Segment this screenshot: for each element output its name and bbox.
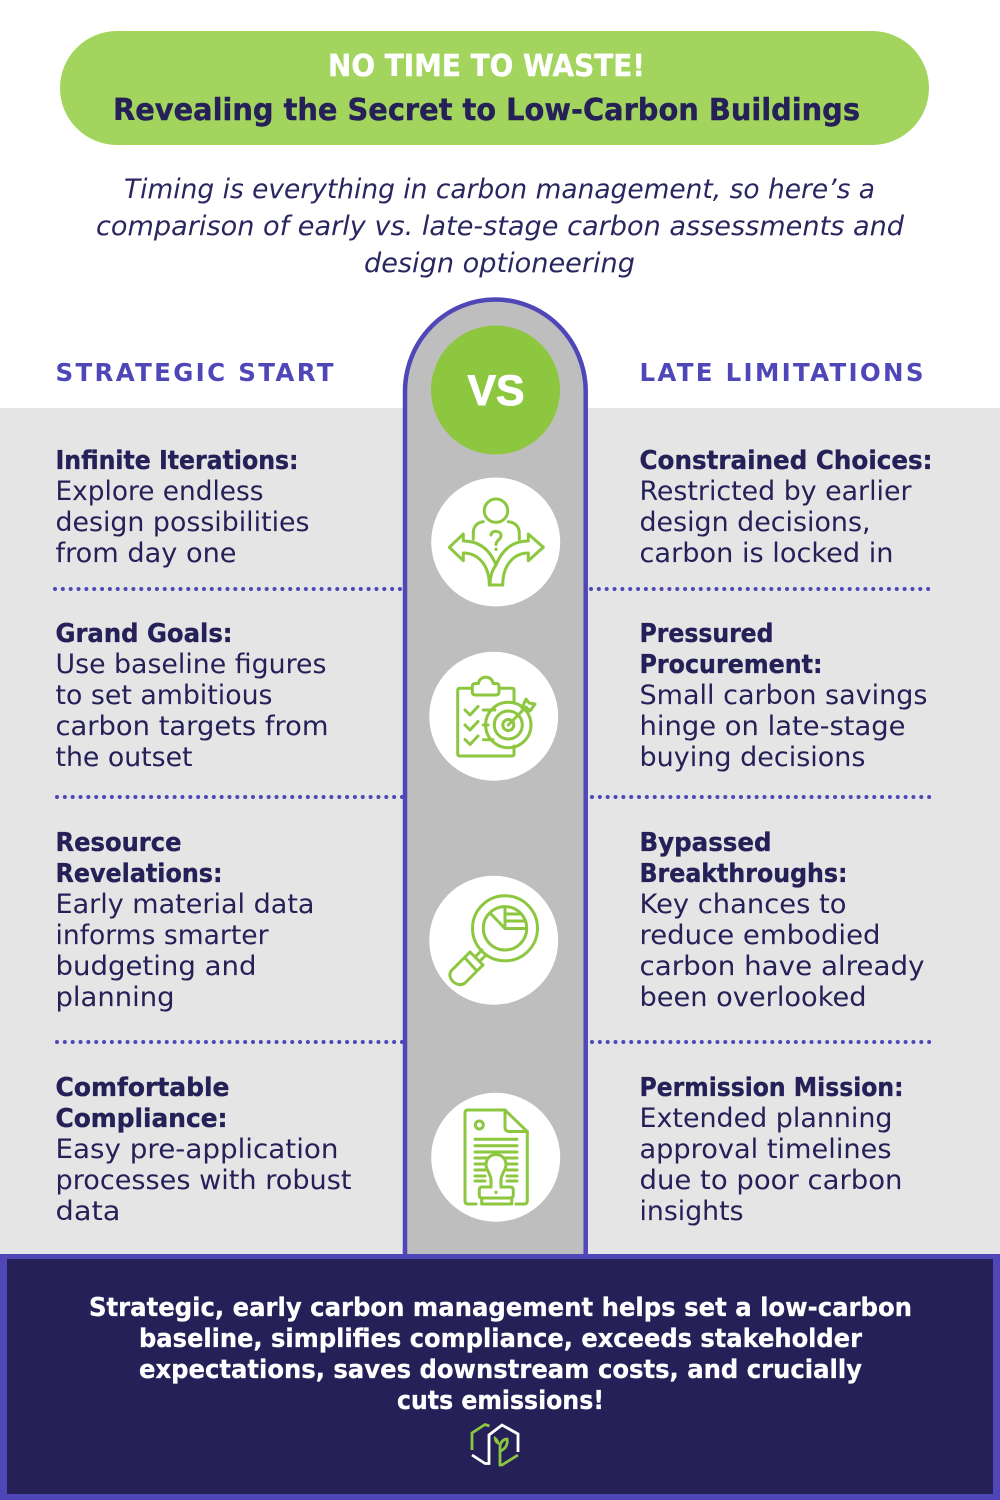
item: infinite iterations: [56, 446, 310, 569]
icon: company logo: [472, 1424, 518, 1465]
panel: conclusion footer: [0, 1254, 1000, 1500]
panel: grey comparison background: [0, 408, 1000, 1256]
item: grand goals: to set ambitious: [56, 680, 272, 711]
item: bypassed breakthroughs: been overlooked: [640, 982, 866, 1013]
item: permission mission: Extended planning: [640, 1103, 892, 1134]
conclusion text: expectations, saves downstream costs, and crucially: [139, 1355, 862, 1385]
item: grand goals: [56, 619, 328, 773]
item: constrained choices: [640, 446, 932, 569]
icon: magnifying glass over pie chart: [429, 876, 558, 1005]
heading: late limitations: LATE LIMITATIONS: [640, 358, 924, 387]
item: resource revelations: informs smarter: [56, 920, 269, 951]
intro text: comparison of early vs. late-stage carbon assessments and: [96, 211, 904, 242]
vs badge: VS: [468, 367, 524, 415]
item: resource revelations: Early material data: [56, 889, 314, 920]
item: infinite iterations: Explore endless: [56, 476, 264, 507]
item: permission mission: [640, 1073, 904, 1227]
item: resource revelations: Revelations:: [56, 859, 222, 889]
item: comfortable compliance: Compliance:: [56, 1104, 228, 1134]
item: permission mission: approval timelines: [640, 1134, 892, 1165]
item: bypassed breakthroughs: carbon have already: [640, 951, 924, 982]
item: grand goals: the outset: [56, 742, 192, 773]
item: constrained choices: carbon is locked in: [640, 538, 894, 569]
icon: person choosing between two paths: [431, 478, 560, 606]
conclusion text: [89, 1293, 912, 1416]
conclusion text: baseline, simplifies compliance, exceeds stakeholder: [139, 1324, 862, 1354]
item: constrained choices: Restricted by earlier: [640, 476, 912, 507]
item: comfortable compliance: processes with robust: [56, 1165, 352, 1196]
icon: document with stamp: [431, 1093, 560, 1222]
item: resource revelations: Resource: [56, 828, 182, 858]
title: NO TIME TO WASTE!: [328, 49, 645, 84]
item: infinite iterations: Infinite Iterations:: [56, 446, 298, 476]
item: bypassed breakthroughs: Breakthroughs:: [640, 859, 848, 889]
item: grand goals: carbon targets from: [56, 711, 328, 742]
panel: left column items: [56, 446, 352, 1227]
panel: title banner: [60, 31, 929, 145]
item: resource revelations: planning: [56, 982, 174, 1013]
item: infinite iterations: design possibilities: [56, 507, 310, 538]
item: grand goals: Use baseline figures: [56, 649, 326, 680]
icon: clipboard with target: [429, 652, 558, 781]
item: comfortable compliance: [56, 1073, 352, 1227]
item: comfortable compliance: Easy pre-application: [56, 1134, 338, 1165]
subtitle: Revealing the Secret to Low-Carbon Buildings: [113, 93, 860, 128]
item: permission mission: due to poor carbon: [640, 1165, 902, 1196]
heading: strategic start: STRATEGIC START: [56, 358, 334, 387]
item: bypassed breakthroughs: [640, 828, 924, 1013]
conclusion text: cuts emissions!: [397, 1386, 604, 1416]
item: pressured procurement: hinge on late-stage: [640, 711, 906, 742]
item: pressured procurement: Pressured: [640, 619, 774, 649]
item: constrained choices: design decisions,: [640, 507, 870, 538]
item: infinite iterations: from day one: [56, 538, 236, 569]
panel: right column items: [640, 446, 932, 1227]
item: resource revelations: [56, 828, 314, 1013]
item: permission mission: Permission Mission:: [640, 1073, 904, 1103]
item: bypassed breakthroughs: Bypassed: [640, 828, 772, 858]
item: resource revelations: budgeting and: [56, 951, 256, 982]
item: grand goals: Grand Goals:: [56, 619, 232, 649]
item: bypassed breakthroughs: Key chances to: [640, 889, 846, 920]
item: comfortable compliance: data: [56, 1196, 120, 1227]
item: pressured procurement: Small carbon savings: [640, 680, 928, 711]
intro text: design optioneering: [364, 248, 635, 279]
intro text: Timing is everything in carbon management, so here’s a: [124, 174, 875, 205]
vs badge: [431, 326, 560, 454]
item: pressured procurement: Procurement:: [640, 650, 822, 680]
item: comfortable compliance: Comfortable: [56, 1073, 230, 1103]
conclusion text: Strategic, early carbon management helps set a low-carbon: [89, 1293, 912, 1323]
item: pressured procurement: [640, 619, 928, 773]
item: permission mission: insights: [640, 1196, 744, 1227]
item: pressured procurement: buying decisions: [640, 742, 866, 773]
item: constrained choices: Constrained Choices:: [640, 446, 932, 476]
intro text: [96, 174, 904, 279]
central capsule column: [405, 300, 586, 1256]
item: bypassed breakthroughs: reduce embodied: [640, 920, 880, 951]
